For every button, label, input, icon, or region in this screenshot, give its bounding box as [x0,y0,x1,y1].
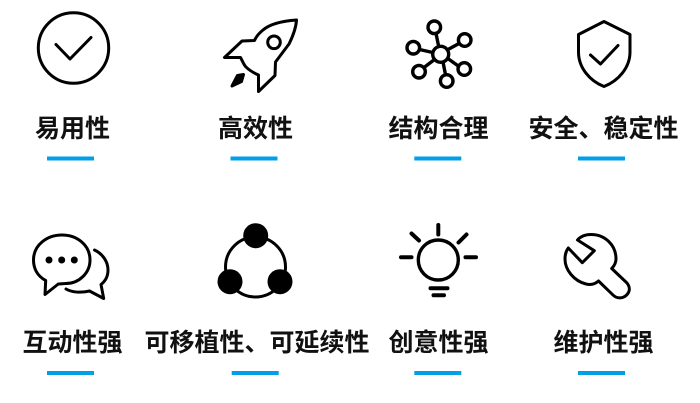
icon: light bulb [401,225,476,295]
panel: 结构合理 [388,21,489,160]
heading: 易用性: 易用性 [35,115,110,143]
accent bar [47,371,94,375]
icon: rocket [224,20,296,92]
heading: 互动性强: 互动性强 [22,329,123,357]
heading: 可移植性、可延续性: 可移植性、可延续性 [144,328,370,357]
accent bar [578,156,625,160]
icon: three linked nodes [218,223,292,297]
panel: 创意性强 [388,225,489,375]
panel: 维护性强 [554,234,654,375]
heading: 安全、稳定性: 安全、稳定性 [528,115,679,143]
icon: shield check [578,22,630,86]
accent bar [578,371,625,375]
panel: 安全、稳定性 [528,22,679,160]
accent bar [414,156,461,160]
icon: wrench [565,234,629,298]
icon: check circle [38,13,109,83]
panel: 互动性强 [22,235,123,375]
panel: 可移植性、可延续性 [144,223,370,375]
accent bar [232,371,279,375]
heading: 维护性强: 维护性强 [554,329,654,357]
accent bar [414,371,461,375]
accent bar [47,156,94,160]
accent bar [230,156,278,160]
icon: chat bubbles [34,235,108,298]
panel: 易用性 [35,13,110,160]
heading: 高效性: 高效性 [218,115,293,143]
icon: network nodes [407,21,471,87]
heading: 创意性强: 创意性强 [388,328,489,357]
panel: 高效性 [218,20,296,160]
heading: 结构合理: 结构合理 [388,115,489,143]
